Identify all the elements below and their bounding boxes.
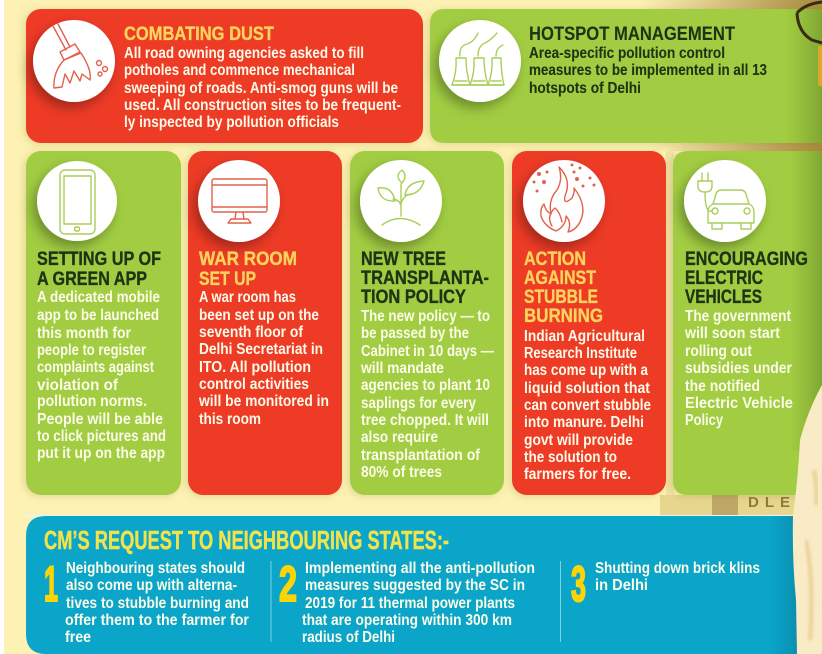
text block: saplings for every [361, 395, 476, 412]
text block: transplantation of [361, 447, 481, 464]
text block: People will be able [37, 411, 163, 428]
heading: HOTSPOT MANAGEMENT [529, 23, 735, 45]
text block: The new policy — to [361, 308, 490, 325]
request 2 text [302, 560, 535, 646]
text block: Indian Agricultural [524, 328, 645, 345]
text block: Electric Vehicle [685, 395, 793, 412]
text block: into manure. Delhi [524, 414, 644, 431]
text block: hotspots of Delhi [529, 80, 641, 97]
text block: A dedicated mobile [37, 289, 160, 306]
panel: electric vehicles [673, 151, 822, 495]
heading: ACTION [524, 248, 586, 270]
heading [361, 248, 489, 308]
heading: A GREEN APP [37, 268, 147, 290]
text block: will mandate [360, 360, 444, 377]
request 1 text [65, 560, 249, 646]
text block: Area-specific pollution control [529, 45, 725, 62]
text block [524, 328, 651, 483]
text block: Policy [685, 412, 723, 429]
panel: combating dust [26, 9, 423, 143]
heading: AGAINST [524, 267, 596, 289]
heading [685, 248, 808, 308]
text block: will be monitored in [198, 393, 329, 410]
text block: sweeping of roads. Anti-smog guns will be [124, 80, 398, 97]
heading: ELECTRIC [685, 267, 763, 289]
text block: complaints against [37, 359, 154, 376]
text block: Cabinet in 10 days — [361, 343, 494, 360]
number 3: 3 [571, 556, 586, 612]
heading [524, 248, 603, 327]
text block: Delhi Secretariat in [199, 341, 323, 358]
icon: sapling [360, 160, 442, 242]
text block: can convert stubble [524, 397, 651, 414]
text block [124, 45, 401, 131]
panel: green app [26, 151, 181, 495]
heading: NEW TREE [361, 248, 446, 270]
text block: violation of [37, 377, 119, 394]
text block: Research Institute [524, 345, 637, 362]
text block [198, 289, 329, 428]
request 1 text: Neighbouring states should [66, 560, 245, 577]
icon: broom [33, 20, 115, 102]
heading: SET UP [199, 268, 256, 290]
text block: will soon start [684, 325, 780, 342]
text block: people to register [37, 342, 146, 359]
text block: tree chopped. It will [361, 412, 489, 429]
heading: BURNING [524, 305, 603, 327]
text block: been set up on the [199, 307, 319, 324]
panel: CM's request [24, 515, 814, 654]
text block: this room [199, 411, 261, 428]
page background: DLE [748, 494, 790, 511]
text block: potholes and commence mechanical [124, 62, 355, 79]
request 3 text [595, 560, 760, 594]
text block: pollution norms. [37, 393, 147, 410]
icon: monitor [198, 160, 280, 242]
heading: SETTING UP OF [37, 248, 161, 270]
heading: COMBATING DUST [124, 23, 274, 45]
heading [37, 248, 161, 290]
text block: agencies to plant 10 [361, 377, 490, 394]
text block: subsidies under [685, 360, 792, 377]
heading: STUBBLE [524, 286, 598, 308]
text block: the solution to [524, 449, 617, 466]
heading [199, 248, 297, 290]
text block: farmers for free. [524, 466, 631, 483]
heading: WAR ROOM [199, 248, 297, 270]
text block [684, 308, 793, 429]
text block: seventh floor of [199, 324, 304, 341]
icon: cooling towers [439, 20, 521, 102]
text block: be passed by the [361, 325, 469, 342]
panel: hotspot management [430, 9, 822, 143]
text block: rolling out [685, 343, 752, 360]
text block: put it up on the app [37, 445, 165, 462]
text block: ITO. All pollution [199, 359, 311, 376]
heading: TION POLICY [361, 286, 466, 308]
text block: control activities [199, 376, 309, 393]
text block: used. All construction sites to be frequent- [124, 97, 401, 114]
request 2 text: that are operating within 300 km [302, 612, 512, 629]
text block: app to be launched [37, 307, 159, 324]
request 2 text: Implementing all the anti-pollution [305, 560, 535, 577]
text block: All road owning agencies asked to fill [124, 45, 364, 62]
photo: bread [793, 385, 822, 654]
text block: ly inspected by pollution officials [124, 114, 339, 131]
text block: govt will provide [524, 432, 633, 449]
panel: stubble burning [512, 151, 666, 495]
icon: smartphone [37, 161, 117, 241]
text block: 80% of trees [361, 464, 442, 481]
number 2: 2 [279, 556, 297, 612]
text block: A war room has [199, 289, 296, 306]
text block: liquid solution that [524, 380, 650, 397]
request 1 text: tives to stubble burning and [66, 595, 249, 612]
text block [37, 289, 166, 462]
request 2 text: 2019 for 11 thermal power plants [305, 595, 515, 612]
heading: TRANSPLANTA- [361, 267, 489, 289]
text block: to click pictures and [37, 428, 166, 445]
panel: war room [188, 151, 342, 495]
request 1 text: offer them to the farmer for [65, 612, 249, 629]
text block [529, 45, 767, 97]
request 1 text: free [65, 629, 91, 646]
text block: The government [685, 308, 791, 325]
text block: measures to be implemented in all 13 [529, 62, 767, 79]
request 3 text: Shutting down brick klins [595, 560, 760, 577]
photo: glasses [797, 2, 822, 86]
request 2 text: measures suggested by the SC in [305, 577, 525, 594]
request 1 text: also come up with alterna- [66, 577, 237, 594]
text block [360, 308, 494, 481]
text block: this month for [37, 325, 131, 342]
number 1: 1 [44, 556, 58, 612]
icon: flame [523, 160, 605, 242]
text block: also require [361, 429, 438, 446]
text block: has come up with a [524, 362, 648, 379]
heading: VEHICLES [685, 286, 762, 308]
heading: CM’S REQUEST TO NEIGHBOURING STATES:- [44, 525, 449, 555]
request 3 text: in Delhi [595, 577, 648, 594]
icon: electric car [684, 160, 766, 242]
request 2 text: radius of Delhi [302, 629, 395, 646]
panel: tree transplantation [350, 151, 504, 495]
text block: the notified [685, 378, 760, 395]
